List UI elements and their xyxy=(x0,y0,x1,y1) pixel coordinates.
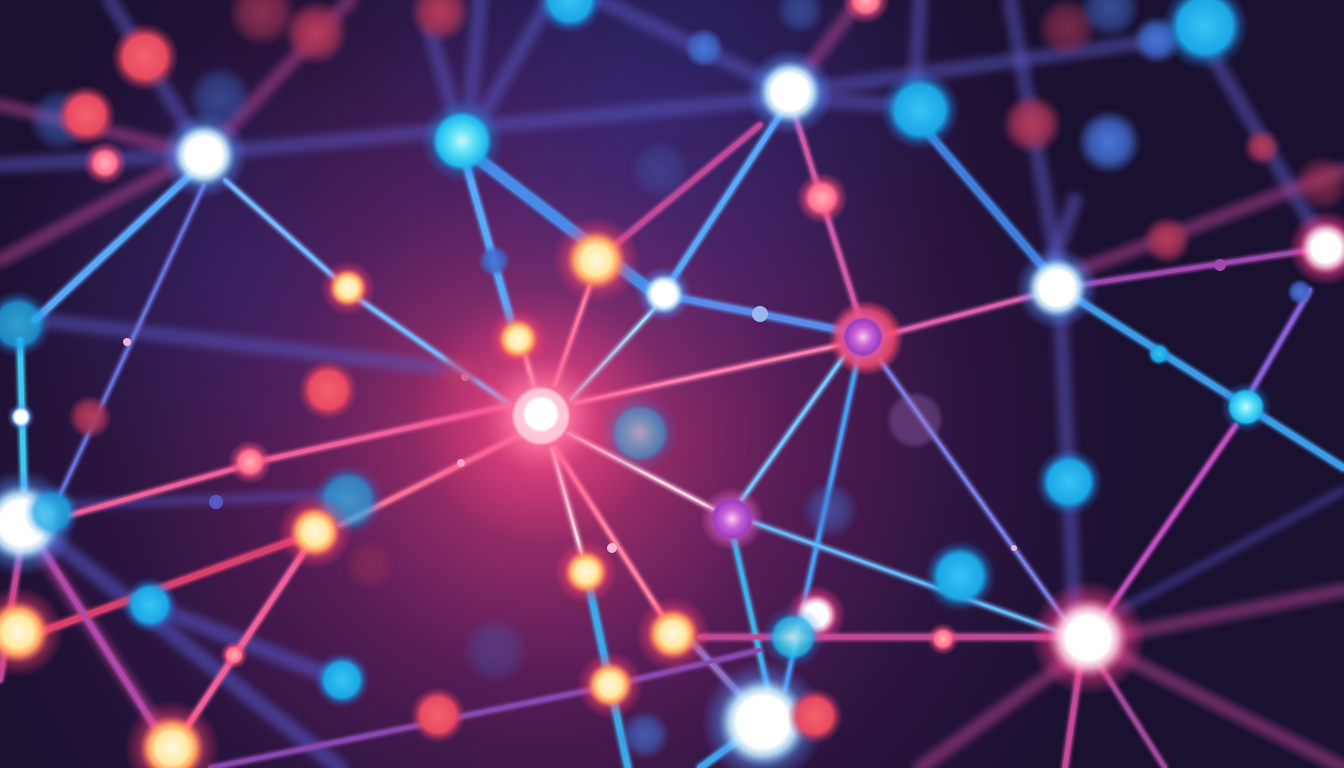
orange nodes xyxy=(0,216,711,768)
central hub xyxy=(411,286,671,546)
small dots along links xyxy=(123,259,1226,553)
pink and red nodes xyxy=(56,0,959,744)
purple nodes xyxy=(700,300,904,551)
